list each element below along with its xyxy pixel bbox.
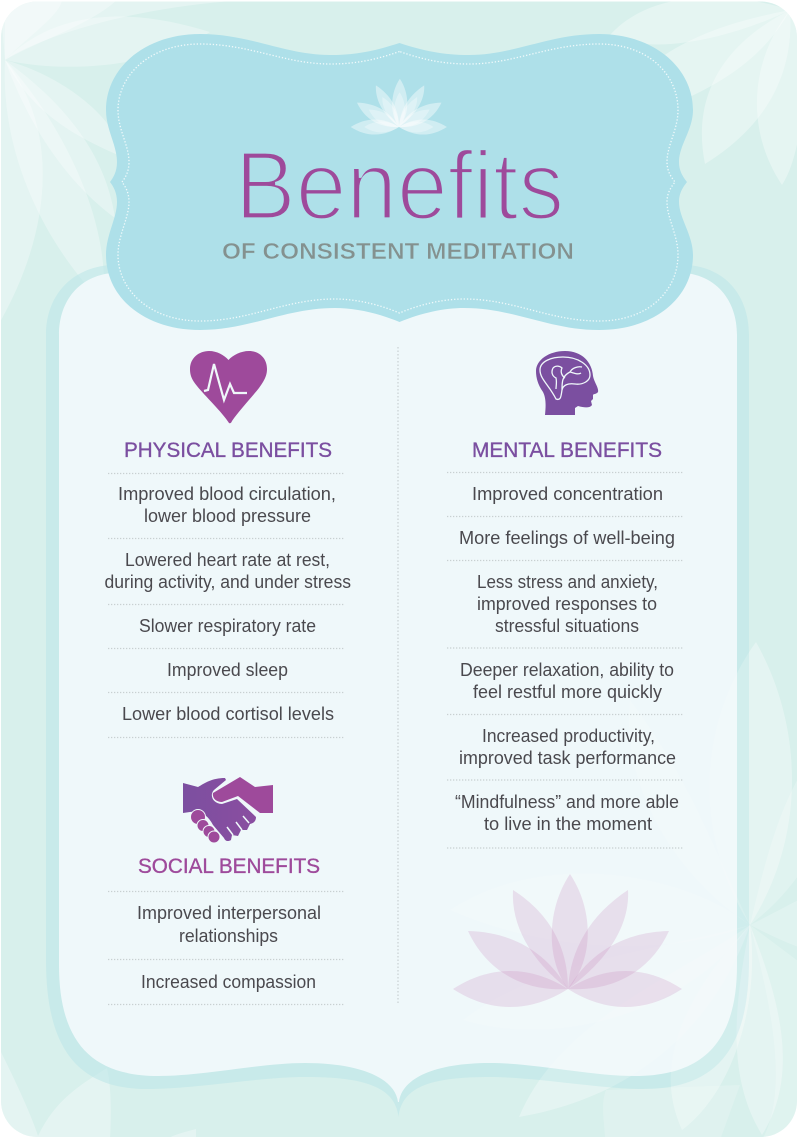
list item: improved responses to bbox=[477, 594, 657, 614]
heading: PHYSICAL BENEFITS bbox=[124, 439, 332, 462]
list item: to live in the moment bbox=[484, 814, 652, 834]
icon: heart with pulse bbox=[190, 351, 267, 423]
list item bbox=[137, 903, 321, 946]
list item bbox=[459, 726, 676, 768]
list item bbox=[460, 660, 674, 702]
list item: Increased productivity, bbox=[482, 726, 655, 746]
list item: Slower respiratory rate bbox=[139, 616, 316, 636]
panel: mental benefits bbox=[447, 351, 684, 848]
list item: Improved sleep bbox=[167, 660, 288, 680]
top-left background petals bbox=[1, 2, 222, 320]
list item bbox=[104, 550, 351, 592]
list item bbox=[455, 792, 679, 834]
title: Benefits bbox=[235, 131, 564, 240]
list item: stressful situations bbox=[495, 616, 639, 636]
panel: social benefits bbox=[108, 777, 345, 1004]
list item: Less stress and anxiety, bbox=[477, 572, 658, 592]
list item: “Mindfulness” and more able bbox=[455, 792, 679, 812]
top-right background petals bbox=[600, 0, 797, 185]
panel background bbox=[59, 273, 737, 1102]
panel: physical benefits bbox=[104, 351, 351, 738]
list item: feel restful more quickly bbox=[473, 682, 662, 702]
list item: More feelings of well-being bbox=[459, 528, 675, 548]
icon: large lotus bbox=[453, 874, 682, 1007]
center divider bbox=[397, 347, 399, 1004]
icon: head with brain bbox=[536, 351, 598, 415]
list item: Improved interpersonal bbox=[137, 903, 321, 923]
heading: SOCIAL BENEFITS bbox=[138, 855, 320, 878]
list item bbox=[118, 484, 336, 526]
list item: relationships bbox=[179, 926, 278, 946]
faint petals over panel bbox=[450, 642, 792, 1135]
heading: MENTAL BENEFITS bbox=[472, 439, 662, 462]
list item: during activity, and under stress bbox=[104, 572, 351, 592]
list item: Deeper relaxation, ability to bbox=[460, 660, 674, 680]
icon: handshake bbox=[183, 777, 273, 843]
list item: Lowered heart rate at rest, bbox=[125, 550, 330, 570]
icon: small white lotus bbox=[351, 79, 447, 135]
bottom-left background petals bbox=[1, 1052, 196, 1137]
plaque: title banner bbox=[106, 34, 693, 330]
list item: Lower blood cortisol levels bbox=[122, 704, 334, 724]
subtitle: OF CONSISTENT MEDITATION bbox=[222, 238, 574, 264]
list item bbox=[477, 572, 658, 636]
list item: Increased compassion bbox=[141, 972, 316, 992]
list item: Improved concentration bbox=[472, 484, 663, 504]
list item: improved task performance bbox=[459, 748, 676, 768]
list item: lower blood pressure bbox=[144, 506, 311, 526]
bottom-right background petals bbox=[736, 791, 792, 1119]
pulse line bbox=[204, 364, 247, 400]
list item: Improved blood circulation, bbox=[118, 484, 336, 504]
panel rim bbox=[46, 265, 749, 1117]
